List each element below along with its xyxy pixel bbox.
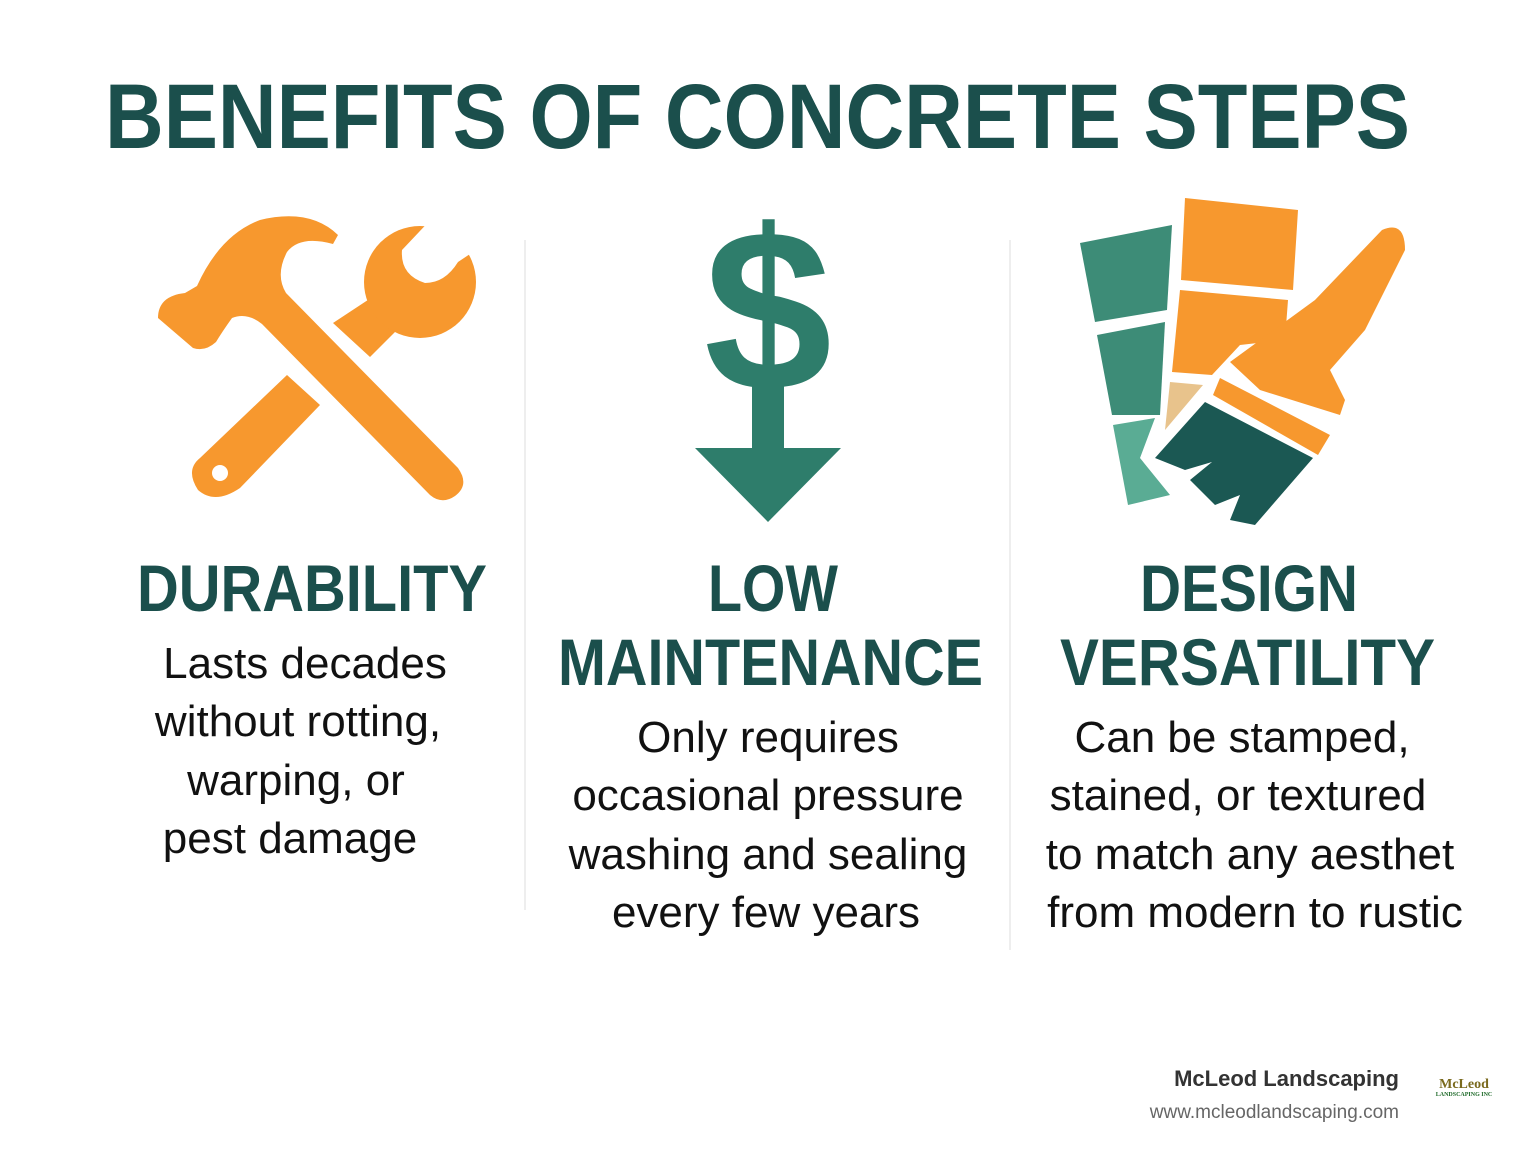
heading: low maintenance: LOW — [708, 551, 839, 625]
text: low maintenance body: every few years — [612, 888, 920, 937]
text: design versatility body: to match any aesthet — [1046, 830, 1454, 879]
logo — [1436, 1077, 1492, 1098]
text: durability body: without rotting, — [154, 697, 441, 746]
logo: LANDSCAPING INC — [1436, 1092, 1492, 1098]
text: durability body: pest damage — [163, 814, 417, 863]
footer: brand — [1149, 1066, 1399, 1123]
text: design versatility body: stained, or textured — [1050, 771, 1426, 820]
text: low maintenance body — [568, 713, 967, 937]
text: durability body: warping, or — [186, 756, 405, 805]
text: low maintenance body: Only requires — [637, 713, 899, 762]
text: low maintenance body: washing and sealing — [568, 830, 967, 879]
icon: swatches and paintbrush — [1080, 198, 1405, 525]
logo: McLeod — [1439, 1077, 1489, 1092]
icon: dollar with down arrow — [695, 182, 841, 522]
text: durability body: Lasts decades — [163, 639, 447, 688]
icon: dollar with down arrow: $ — [704, 182, 832, 439]
heading: design versatility: DESIGN — [1140, 551, 1358, 625]
footer: brand: www.mcleodlandscaping.com — [1149, 1102, 1399, 1123]
heading: design versatility — [1060, 551, 1435, 699]
footer: brand: McLeod Landscaping — [1174, 1066, 1399, 1091]
text: design versatility body: Can be stamped, — [1074, 713, 1410, 762]
heading: design versatility: VERSATILITY — [1060, 625, 1435, 699]
heading: low maintenance: MAINTENANCE — [558, 625, 983, 699]
text: durability body — [154, 639, 447, 863]
icon: hammer and wrench — [158, 210, 480, 500]
heading: durability: DURABILITY — [137, 551, 487, 625]
text: design versatility body — [1046, 713, 1463, 937]
text: low maintenance body: occasional pressure — [572, 771, 964, 820]
heading: low maintenance — [558, 551, 983, 699]
text: design versatility body: from modern to rustic — [1047, 888, 1463, 937]
